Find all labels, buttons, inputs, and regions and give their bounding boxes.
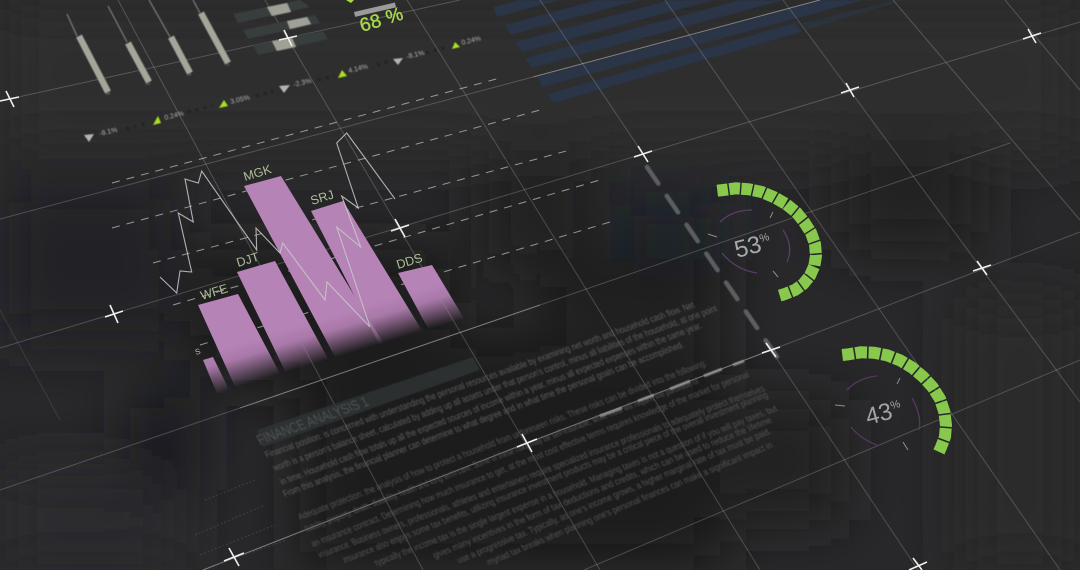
gauge segments	[717, 188, 816, 296]
bar labels: S	[194, 347, 202, 357]
paragraph: adequate protection	[296, 358, 780, 569]
paragraph: adequate protection: insurance. Business owners, professionals, athletes and entertainers require specialized insurance professionals to adequately protect themselves.	[316, 383, 769, 561]
panel: vertical sticks: 71	[224, 61, 230, 67]
panel: vertical sticks	[67, 0, 230, 96]
dashed vertical divider	[647, 167, 777, 357]
ticks	[708, 212, 778, 277]
value: %	[758, 231, 771, 245]
heading: FINANCE ANALYSIS 1	[254, 394, 372, 449]
indicators row: 0.24%	[461, 35, 482, 47]
panel: vertical sticks: 54	[186, 71, 192, 77]
bar: WFE	[198, 294, 295, 420]
panel: vertical sticks: 88	[105, 90, 111, 96]
indicators row: 4.14%	[348, 63, 369, 75]
bar chart	[194, 162, 480, 420]
paragraph: financial position: From this analysis, the financial planner can determine to what degree and in what time the personal goals can be accomplished.	[281, 340, 686, 500]
inner arcs	[847, 376, 920, 445]
bar: SRJ	[311, 201, 440, 375]
value: %	[889, 398, 902, 412]
paragraph: adequate protection: insurance also enjoys some tax benefits, utilizing insurance investment products may be a critical piece of the overall investment planning	[341, 390, 770, 566]
value: 53	[732, 231, 764, 264]
bar labels: MGK	[242, 162, 274, 184]
indicators row: -2.3%	[293, 78, 312, 89]
bar: small left	[203, 357, 240, 420]
paragraph: adequate protection: an insurance contract. Determining how much insurance to get, at the most cost effective terms requires knowledge of the market for personal	[309, 370, 751, 550]
paragraph: adequate protection: myriad tax breaks when planning one's personal finances can make a significant impact in	[485, 440, 775, 568]
panel: horizontal mini bars	[233, 0, 328, 55]
paragraph: financial position: in time. Household cash flow totals up all the expected sources of income within a year, minus all expected expenses within the same year.	[278, 321, 704, 488]
paragraph: adequate protection: Adequate protection: the analysis of how to protect a household from unforeseen risks. These risks can be divided into the following:	[296, 358, 709, 523]
indicators row	[84, 35, 482, 142]
line chart overlay	[160, 133, 395, 327]
stat: 68 percent: TESTING PRO	[356, 0, 393, 11]
stat: 68 percent: 68 %	[357, 4, 406, 37]
bar labels: DJT	[235, 250, 261, 270]
bar labels: DDS	[395, 251, 424, 272]
panel: blue horizontal bars	[493, 0, 905, 103]
highlighted text glints on grid line	[600, 361, 744, 416]
paragraph: adequate protection: typically the income tax is the single largest expense in a household. Managing taxes is not a question of if you will pay taxes, but	[373, 403, 780, 569]
bar labels: SRJ	[309, 188, 335, 208]
value: 43	[863, 398, 895, 431]
gauge: 53 percent	[708, 188, 816, 296]
bar labels: WFE	[199, 281, 229, 303]
panel: finance analysis text	[254, 300, 780, 569]
indicators row: -8.1%	[406, 50, 425, 61]
dim dotted lines lower left	[195, 480, 287, 565]
paragraph: financial position: Financial position: is concerned with understanding the personal resources available by examining net worth and household cash flow. Net	[263, 300, 697, 461]
indicators row: -8.1%	[99, 127, 118, 138]
indicators row: 0.24%	[164, 110, 185, 122]
indicators row: 3.05%	[230, 94, 251, 106]
bar: MGK	[244, 176, 400, 385]
bar: DJT	[237, 261, 345, 402]
paragraph: adequate protection: liability, property, death, disability, health and long term care. Some of these risks may be self-insurable, while most will require the purchase of	[303, 376, 701, 535]
heading band	[257, 357, 480, 447]
panel: chart dashed guide lines	[112, 78, 610, 345]
bar: DDS	[398, 265, 480, 360]
paragraph: financial position: worth is a person's balance sheet, calculated by adding up all assets under that person's control, minus all liabilities of the household, at one point	[270, 304, 720, 474]
inner arcs	[720, 210, 790, 273]
gauge: 43 percent	[835, 352, 946, 453]
ticks	[835, 378, 908, 450]
paragraph: adequate protection: use a progressive tax. Typically, as one's income grows, a higher marginal rate of tax must be paid.	[455, 426, 774, 566]
gauge segments	[842, 352, 946, 453]
panel: vertical sticks: 62	[145, 80, 151, 86]
bar labels	[194, 162, 424, 357]
paragraph: adequate protection: gives many incentives in the form of tax deductions and credits, which can be used to reduce the lifetime	[431, 415, 774, 561]
